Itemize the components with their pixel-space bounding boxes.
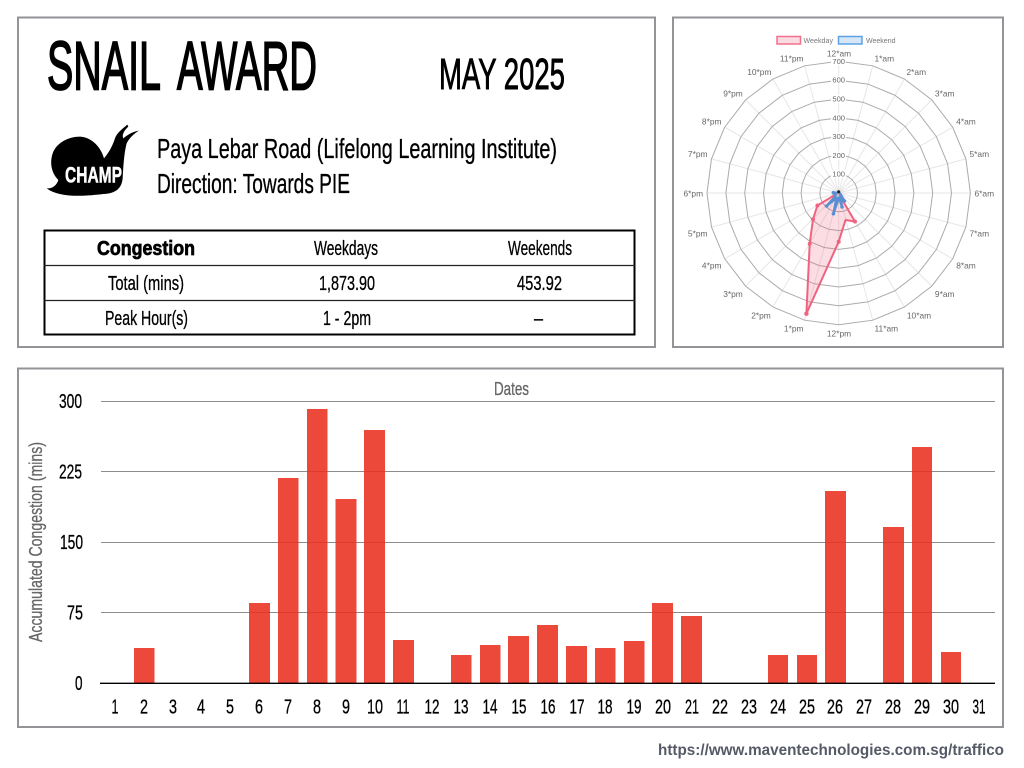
radar hour labels: 11*pm: [780, 53, 804, 63]
table: congestion: 453.92: [517, 273, 562, 295]
radar hour labels: 1*am: [875, 53, 894, 63]
x axis labels: 6: [255, 696, 263, 718]
x axis labels: 15: [512, 696, 526, 718]
x axis labels: 18: [598, 696, 612, 718]
title: AWARD: [177, 28, 317, 104]
radar hour labels: 7*pm: [688, 149, 707, 159]
y axis labels: [59, 391, 83, 695]
x axis labels: 7: [284, 696, 292, 718]
table: congestion: Weekdays: [314, 238, 378, 260]
radar legend: Weekend: [866, 38, 896, 45]
x axis labels: 31: [972, 696, 986, 718]
radar hour labels: 2*pm: [751, 310, 771, 320]
month: MAY 2025: [439, 50, 565, 99]
radar scale labels: 600: [832, 76, 845, 85]
x axis labels: 3: [169, 696, 177, 718]
y axis labels: 75: [67, 602, 83, 624]
weekday series: [804, 192, 857, 316]
y axis labels: 300: [59, 391, 82, 413]
x axis labels: 22: [712, 696, 728, 718]
bars: [134, 409, 961, 683]
table: congestion: Congestion: [97, 238, 195, 260]
y axis labels: 150: [60, 532, 83, 554]
x axis labels: 24: [770, 696, 786, 718]
radar hour labels: 12*pm: [827, 329, 851, 339]
location: Paya Lebar Road (Lifelong Learning Institute): [157, 133, 557, 164]
x axis title: Dates: [494, 379, 529, 399]
radar hour labels: 3*pm: [723, 289, 743, 299]
x axis labels: 17: [570, 696, 584, 718]
source url: https://www.maventechnologies.com.sg/traffico: [658, 742, 1004, 759]
panel: daily bar chart: [18, 368, 1003, 727]
x axis labels: 23: [741, 696, 757, 718]
radar hour labels: 1*pm: [784, 324, 803, 334]
direction: Direction: Towards PIE: [157, 168, 350, 199]
x axis labels: 30: [943, 696, 959, 718]
x axis labels: 14: [482, 696, 498, 718]
radar scale labels: 200: [832, 151, 845, 160]
radar hour labels: 10*am: [907, 310, 931, 320]
title: SNAIL: [47, 28, 161, 104]
radar hour labels: 9*pm: [723, 88, 743, 98]
radar hour labels: 4*am: [956, 117, 976, 127]
table: congestion: –: [534, 308, 544, 330]
radar scale labels: 400: [832, 113, 845, 122]
panel: award summary: [18, 18, 655, 347]
x axis labels: 20: [655, 696, 671, 718]
radar hour labels: 2*am: [907, 67, 926, 77]
x axis labels: 29: [914, 696, 930, 718]
table: congestion: Peak Hour(s): [105, 308, 188, 330]
radar hour labels: 7*am: [970, 228, 989, 238]
icon: snail champ: [47, 125, 139, 196]
radar legend: Weekday: [804, 38, 834, 45]
table: congestion: 1 - 2pm: [323, 308, 371, 330]
x axis labels: 1: [112, 696, 118, 718]
radar hour labels: 9*am: [935, 289, 954, 299]
table: congestion: 1,873.90: [319, 273, 375, 295]
radar hour labels: 8*pm: [702, 117, 721, 127]
x axis labels: 11: [396, 696, 410, 718]
x axis labels: 19: [626, 696, 642, 718]
radar hour labels: 5*pm: [688, 228, 707, 238]
x axis labels: 12: [424, 696, 440, 718]
x axis labels: [112, 696, 986, 718]
x axis labels: 13: [454, 696, 468, 718]
radar hour labels: 6*pm: [684, 189, 703, 199]
x axis labels: 2: [140, 696, 148, 718]
x axis labels: 21: [685, 696, 699, 718]
radar scale labels: 700: [832, 57, 845, 66]
radar scale labels: 300: [832, 132, 845, 141]
y axis labels: 225: [59, 462, 82, 484]
x axis labels: 8: [313, 696, 321, 718]
radar scale labels: 500: [832, 94, 845, 104]
radar hour labels: 3*am: [935, 88, 954, 98]
radar hour labels: [684, 49, 994, 339]
radar scale labels: 100: [832, 170, 845, 179]
table: congestion: [44, 230, 635, 334]
radar hour labels: 8*am: [956, 261, 976, 271]
radar hour labels: 6*am: [975, 189, 994, 199]
radar hour labels: 5*am: [970, 149, 989, 159]
x axis labels: 16: [540, 696, 556, 718]
grid lines: [101, 402, 995, 612]
table: congestion: Weekends: [508, 238, 572, 260]
y axis title: Accumulated Congestion (mins): [26, 442, 46, 642]
table: congestion: Total (mins): [108, 273, 184, 295]
x axis labels: 5: [226, 696, 234, 718]
x axis labels: 10: [367, 696, 383, 718]
radar hour labels: 12*am: [827, 49, 851, 59]
x axis labels: 26: [827, 696, 843, 718]
x axis labels: 28: [885, 696, 901, 718]
x axis labels: 9: [342, 696, 350, 718]
radar grid: [707, 61, 970, 325]
icon: snail champ: CHAMP: [65, 162, 122, 187]
y axis labels: 0: [75, 673, 82, 695]
radar hour labels: 11*am: [875, 324, 898, 334]
radar hour labels: 4*pm: [702, 261, 721, 271]
radar legend: [777, 36, 896, 45]
x axis labels: 27: [856, 696, 872, 718]
x axis labels: 4: [197, 696, 205, 718]
x axis labels: 25: [799, 696, 815, 718]
radar scale labels: [831, 57, 846, 179]
panel: radar chart: [673, 18, 1003, 347]
radar hour labels: 10*pm: [747, 67, 771, 77]
weekend series: [825, 190, 846, 216]
